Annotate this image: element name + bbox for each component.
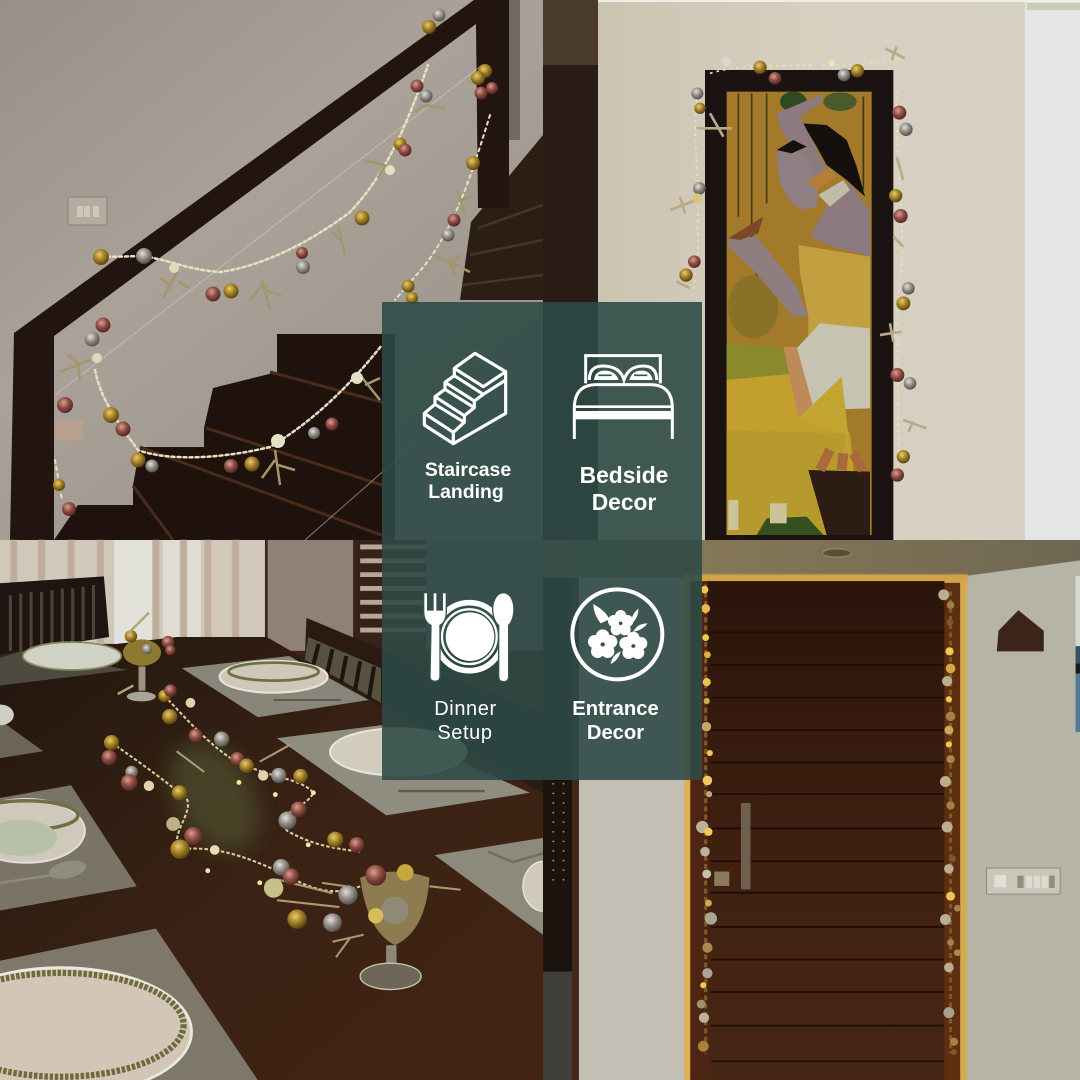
item: staircase landing bbox=[424, 353, 511, 503]
photo: framed painting bbox=[543, 0, 1080, 580]
door bbox=[707, 581, 944, 1080]
photo: staircase with garland bbox=[0, 0, 543, 540]
label: Staircase Landing: Staircase bbox=[425, 459, 511, 481]
large goblet bbox=[360, 864, 429, 990]
curtains and window bbox=[0, 540, 267, 644]
translucent central panel bbox=[382, 302, 702, 780]
right edge objects bbox=[1076, 576, 1080, 732]
label: Bedside Decor: Decor bbox=[592, 489, 656, 515]
lower stairs bbox=[54, 334, 395, 540]
label: Staircase Landing: Landing bbox=[428, 481, 504, 503]
door glow bbox=[683, 574, 968, 1080]
photo: dining table bbox=[0, 540, 564, 1080]
slatted partition bbox=[353, 540, 543, 651]
ceiling bbox=[543, 540, 1080, 581]
door garlands bbox=[696, 585, 961, 1055]
dark side room bbox=[543, 578, 579, 1080]
lock plate bbox=[714, 872, 729, 886]
label: Entrance Decor: Entrance bbox=[572, 698, 659, 720]
item: dinner setup bbox=[424, 593, 513, 744]
item: bedside decor bbox=[574, 356, 672, 515]
icon: flowers in circle bbox=[572, 589, 662, 679]
frame garland bbox=[670, 47, 927, 482]
icon: staircase bbox=[424, 353, 506, 444]
icon: bed bbox=[574, 356, 672, 439]
icon: fork plate spoon bbox=[424, 593, 513, 681]
table top bbox=[0, 637, 543, 1080]
painting in frame bbox=[670, 47, 927, 580]
glass edge bbox=[55, 66, 481, 540]
figure bbox=[727, 95, 870, 535]
dark drips and green mottling bbox=[728, 92, 863, 338]
label: Dinner Setup: Setup bbox=[437, 722, 493, 744]
garland strings bbox=[55, 65, 490, 500]
handrail and posts bbox=[10, 0, 509, 540]
wall switch plate bbox=[987, 868, 1060, 894]
back chair bbox=[0, 576, 109, 654]
label: Entrance Decor: Decor bbox=[587, 722, 644, 744]
upper stair block bbox=[460, 135, 543, 300]
table garland bbox=[101, 684, 461, 957]
photo: entrance door bbox=[543, 540, 1080, 1080]
wall ornament bbox=[997, 610, 1044, 651]
small goblet bbox=[118, 613, 176, 701]
door handle bbox=[741, 803, 751, 889]
wall switch bbox=[68, 197, 107, 225]
white walls bbox=[579, 578, 685, 1080]
label: Bedside Decor: Bedside bbox=[580, 462, 668, 488]
leaf sprigs bbox=[60, 105, 472, 485]
right chair bbox=[305, 618, 543, 793]
ornaments bbox=[53, 8, 498, 516]
item: entrance decor bbox=[572, 589, 662, 744]
place settings bbox=[0, 642, 564, 1080]
label: Dinner Setup: Dinner bbox=[434, 698, 497, 720]
